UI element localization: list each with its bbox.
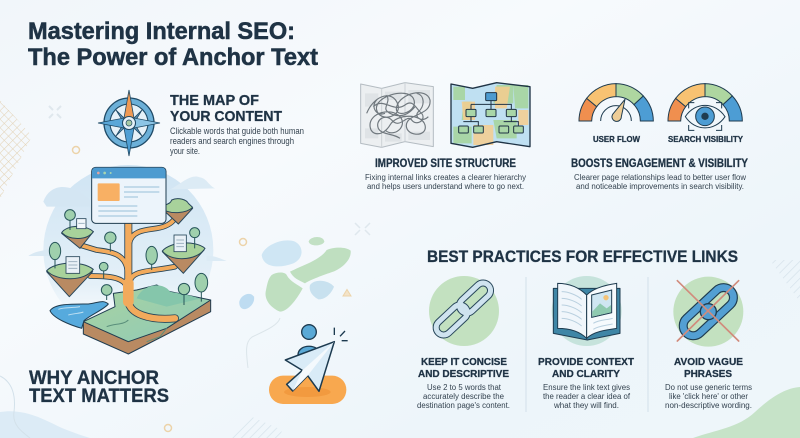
text: keep it concise: KEEP IT CONCISE [421,356,507,368]
icon: user clicking cursor [269,325,348,404]
small trees [49,210,208,305]
title [28,18,318,71]
text: avoid vague phrases: like 'click here' or other [669,392,748,401]
icon: open book [552,276,622,346]
icon: tangled map [361,83,433,147]
floating islands [47,199,205,297]
icon: organised map [451,83,530,147]
text: provide context [538,356,635,410]
text: avoid vague phrases: non-descriptive wording. [665,401,752,410]
text: keep it concise [417,356,510,410]
icon: chain link [429,276,499,346]
text: site structure description: and helps users understand where to go next. [367,182,524,191]
text: site structure description [365,173,526,191]
browser window [92,167,166,223]
icon: broken link crossed out [673,277,743,347]
heading: the map of your content [170,92,282,125]
text: keep it concise: destination page's content. [417,401,510,410]
heading: why anchor text matters: TEXT MATTERS [29,385,169,407]
map blobs [239,237,351,312]
column dividers [526,277,648,412]
text: avoid vague phrases [665,356,752,410]
text: provide context: the reader a clear idea of [543,392,631,401]
heading: boosts engagement and visibility: BOOSTS ENGAGEMENT & VISIBILITY [571,158,748,170]
text: map description: readers and search engines through [170,136,294,146]
mini documents [66,219,186,273]
title: Mastering Internal SEO: [28,18,295,45]
text: avoid vague phrases: PHRASES [684,368,732,380]
heading: best practices: BEST PRACTICES FOR EFFECTIVE LINKS [427,248,738,266]
text: engagement description [574,173,746,191]
ground base [50,285,211,354]
text: engagement description: and noticeable improvements in search visibility. [576,182,744,191]
text: keep it concise: AND DESCRIPTIVE [418,368,509,380]
heading: the map of your content: THE MAP OF [170,92,259,109]
text: map description: Clickable words that guide both human [170,126,304,136]
text: keep it concise: Use 2 to 5 words that [427,383,502,392]
icon: compass [98,90,160,156]
heading: the map of your content: YOUR CONTENT [170,108,282,125]
gauge: search visibility [668,84,742,130]
text: keep it concise: accurately describe the [423,392,504,401]
decorative background shapes [0,100,800,438]
label: user flow: USER FLOW [593,134,641,144]
text: provide context: what they will find. [553,401,619,410]
text: site structure description: Fixing internal links creates a clearer hierarchy [365,173,526,182]
text: provide context: PROVIDE CONTEXT [538,356,635,368]
text: avoid vague phrases: AVOID VAGUE [674,356,743,368]
label: search visibility: SEARCH VISIBILITY [668,134,743,144]
heading: why anchor text matters: WHY ANCHOR [29,367,159,389]
text: engagement description: Clearer page relationships lead to better user flow [574,173,746,182]
gauge: user flow [579,84,653,121]
text: provide context: AND CLARITY [552,368,620,380]
trunk and branches [80,218,175,319]
text: map description: your site. [170,146,200,156]
title: The Power of Anchor Text [28,44,318,71]
text: map description [170,126,304,156]
text: avoid vague phrases: Do not use generic terms [665,383,752,392]
heading: why anchor text matters [29,367,169,407]
text: provide context: Ensure the link text gives [543,383,630,392]
illustration: website tree on floating islands [28,165,227,354]
heading: improved site structure: IMPROVED SITE STRUCTURE [375,158,516,170]
